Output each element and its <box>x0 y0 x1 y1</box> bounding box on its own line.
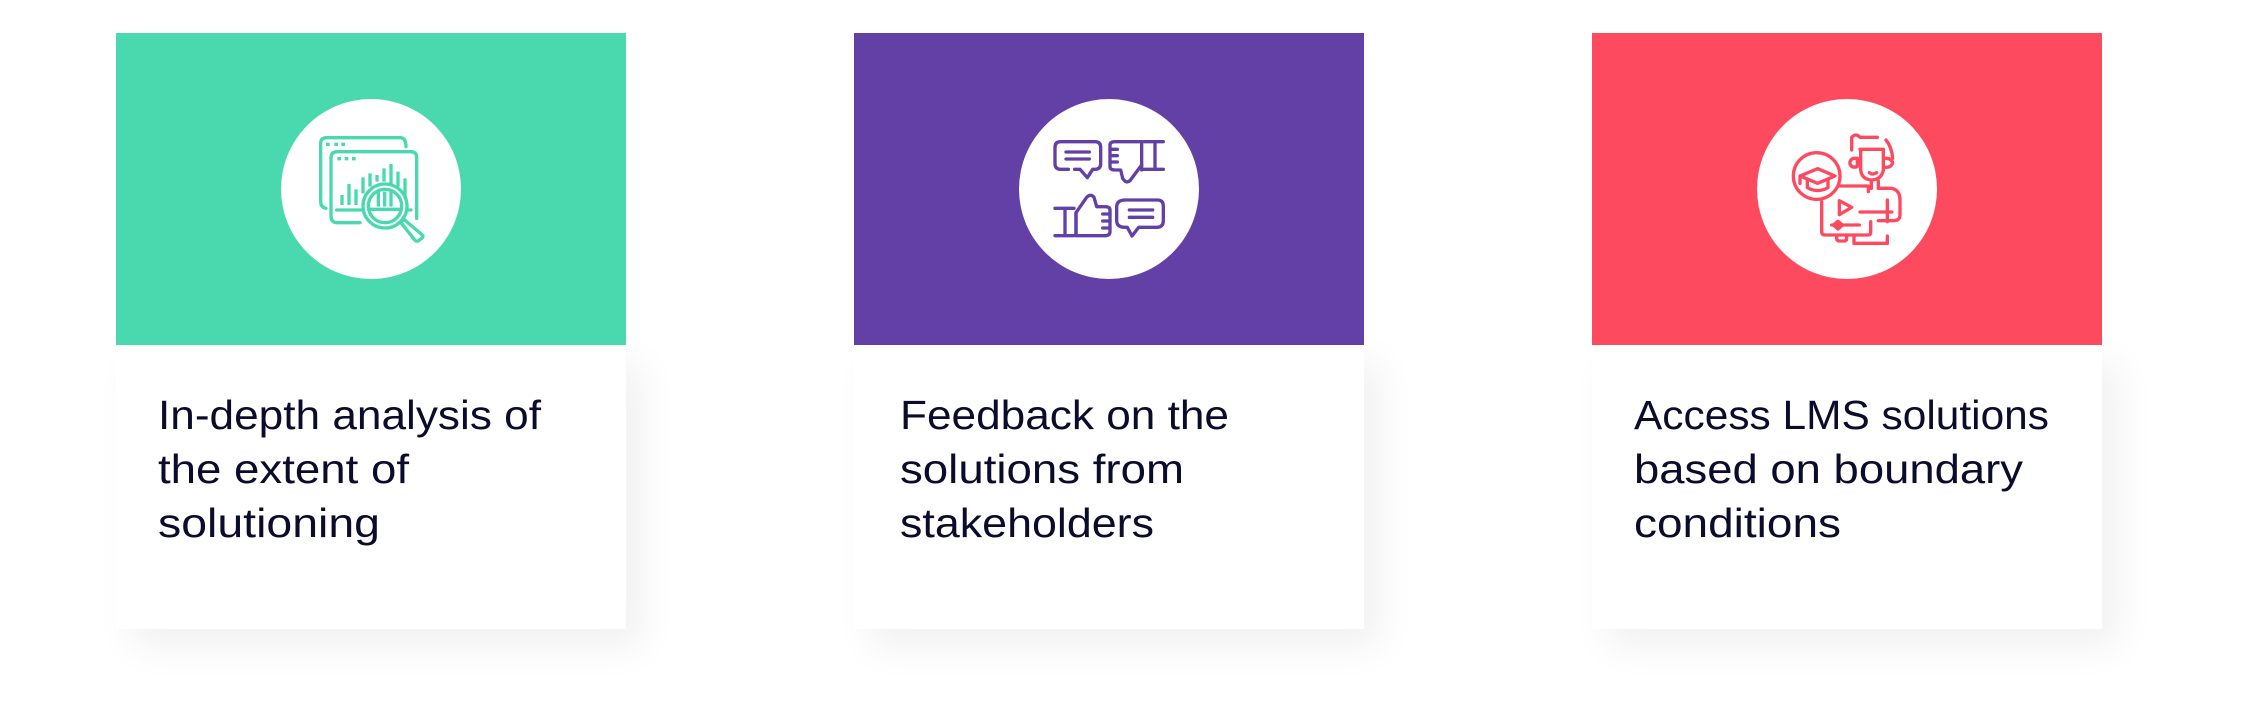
text block: LMS: based on boundary <box>1634 446 2024 492</box>
panel: LMS card <box>1592 33 2114 642</box>
header: green band <box>116 33 626 345</box>
text block: analysis: In-depth analysis of <box>158 392 542 438</box>
text block: feedback: Feedback on the <box>900 392 1229 438</box>
icon: charts under magnifying glass <box>281 99 461 279</box>
panel: feedback card <box>854 33 1376 642</box>
text block: analysis: solutioning <box>158 500 380 546</box>
text block: analysis: the extent of <box>158 446 410 492</box>
text block: LMS: Access LMS solutions <box>1634 392 2049 438</box>
text block: feedback: stakeholders <box>900 500 1154 546</box>
header: purple band <box>854 33 1364 345</box>
text block: LMS: conditions <box>1634 500 1841 546</box>
header: red band <box>1592 33 2102 345</box>
text block: LMS <box>1592 345 2102 629</box>
panel: analysis card <box>116 33 638 642</box>
icon: tutor with video screen and graduation cap <box>1757 99 1937 279</box>
text block: analysis <box>116 345 626 629</box>
text block: feedback: solutions from <box>900 446 1184 492</box>
icon: speech bubbles with thumbs up and down <box>1019 99 1199 279</box>
text block: feedback <box>854 345 1364 629</box>
